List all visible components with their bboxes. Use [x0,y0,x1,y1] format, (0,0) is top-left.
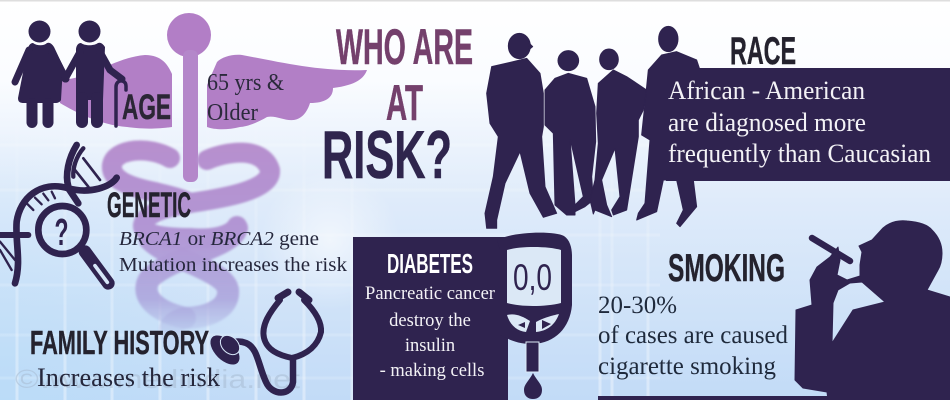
walking cane [116,81,126,126]
cigar [812,238,850,261]
text: age detail: 65 yrs & [207,70,284,96]
title: RISK? [322,117,452,193]
text: smoking detail: cigarette smoking [598,353,776,380]
text: race detail: are diagnosed more [668,108,866,137]
text: race detail: African - American [668,76,865,105]
tube to chest piece [226,342,293,392]
text: age detail: Older [207,100,258,126]
figure [795,221,950,400]
caduceus background symbol [57,13,367,340]
heading: race: RACE [730,30,796,73]
chest piece [205,330,245,370]
icon: smoker silhouette [795,221,950,400]
icon: question mark: ? [54,212,68,254]
person three [590,49,647,217]
text: smoking detail: 20-30% [598,292,677,319]
dna strand [0,145,117,283]
heading: family history: FAMILY HISTORY [30,325,209,362]
title: WHO ARE [336,19,473,75]
person two [545,51,596,215]
test strip [526,342,539,372]
panel: diabetes [353,237,508,400]
text: diabetes detail: Pancreatic cancer [365,284,495,304]
icon: dna with magnifier [0,145,117,283]
person four [637,26,700,227]
text: race detail [668,76,931,168]
text: genetic detail [119,228,347,276]
woman figure [15,20,66,128]
heading: genetic: GENETIC [107,186,191,225]
panel: race [666,68,950,181]
icon: glucose meter [497,233,572,399]
meter screen [507,247,561,306]
decorative base bar [598,396,838,400]
blood drop [524,373,542,399]
meter reading: 0,0 [513,257,552,298]
person one [485,33,557,228]
icon: stethoscope [205,292,321,392]
text: genetic detail: BRCA1 or BRCA2 gene [119,228,319,250]
title [322,19,473,193]
magnifier lens [38,206,86,254]
text: diabetes detail: - making cells [380,361,484,381]
text: genetic detail: Mutation increases the risk [119,254,347,276]
text: diabetes detail [365,284,495,381]
heading: smoking: SMOKING [668,247,785,290]
text: age detail [207,70,284,126]
text: smoking detail [598,292,788,380]
heading: age: AGE [122,88,171,127]
text: smoking detail: of cases are caused [598,322,788,349]
magnifier handle [85,252,108,283]
text: race detail: frequently than Caucasian [668,139,931,168]
icon: elderly couple [15,20,126,128]
text: diabetes detail: destroy the [389,311,471,331]
man figure [65,20,122,128]
icon: group of people silhouettes [485,26,700,228]
text: family history detail: Increases the risk [37,363,220,392]
ear tubes [263,300,321,358]
title: AT [386,75,423,131]
meter buttons [507,314,559,332]
watermark: ©www.medindia.net [15,364,301,394]
text: diabetes detail: insulin [405,336,455,356]
heading: diabetes: DIABETES [387,248,473,279]
